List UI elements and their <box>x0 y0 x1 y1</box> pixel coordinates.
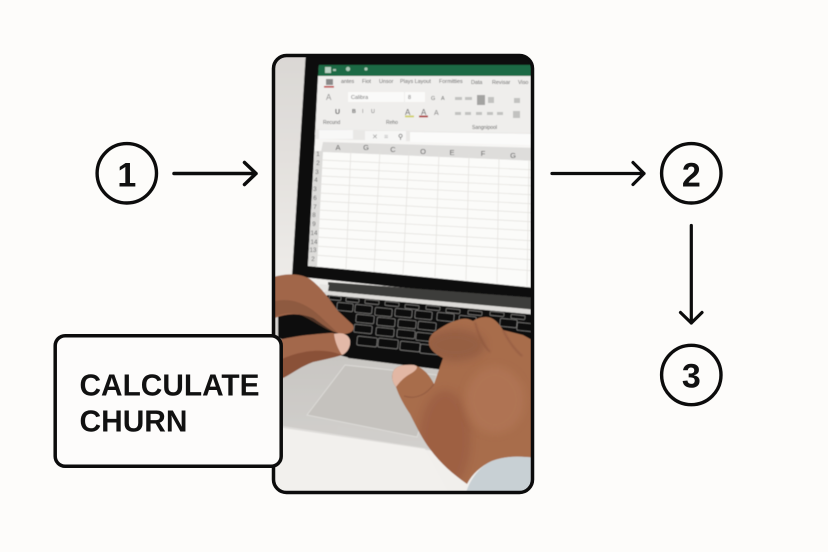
left hand <box>270 274 354 384</box>
arrow: photo to step 2 <box>552 162 644 184</box>
formula bar <box>315 135 410 141</box>
laptop screen: ✕ <box>372 134 378 141</box>
title bar <box>318 65 536 76</box>
step 2 badge: 2 <box>682 156 701 194</box>
laptop screen: antes <box>341 79 354 85</box>
laptop screen: G <box>431 96 435 102</box>
trackpad <box>307 365 437 437</box>
laptop screen: Unsor <box>379 79 394 85</box>
laptop screen: 3 <box>315 169 319 176</box>
laptop screen: Viso <box>518 80 528 86</box>
table surface <box>283 428 425 450</box>
step 2 badge <box>662 144 721 203</box>
callout: calculate churn: CALCULATE <box>80 369 260 403</box>
laptop screen: 3 <box>313 186 317 193</box>
column headers <box>321 142 536 161</box>
step 1 badge <box>97 144 156 203</box>
laptop screen: 7 <box>313 204 317 211</box>
step 3 badge: 3 <box>682 358 701 396</box>
laptop screen: F <box>481 149 486 158</box>
laptop screen: 2 <box>311 256 315 263</box>
laptop screen: U <box>371 109 375 115</box>
wall behind laptop <box>275 57 306 230</box>
arrow: step 1 to photo <box>174 162 256 184</box>
ribbon <box>314 75 319 136</box>
laptop screen: Plays Layout <box>400 79 431 85</box>
laptop deck <box>275 317 440 450</box>
laptop screen: Fiot <box>362 79 371 85</box>
laptop screen: 2 <box>316 160 320 167</box>
laptop screen: O <box>420 147 426 156</box>
laptop screen: Revisar <box>492 80 510 86</box>
laptop screen: 4 <box>314 177 318 184</box>
callout: calculate churn <box>55 336 281 466</box>
laptop screen: 6 <box>313 195 317 202</box>
laptop screen: 14 <box>311 230 318 237</box>
laptop bezel <box>292 50 538 302</box>
laptop screen: A <box>434 110 439 117</box>
laptop screen: Calibra <box>351 95 368 101</box>
laptop screen: A <box>326 93 332 102</box>
laptop screen <box>308 65 536 288</box>
spreadsheet grid <box>328 268 531 288</box>
laptop screen: Recund <box>323 120 340 126</box>
step 1 badge: 1 <box>117 156 136 194</box>
laptop screen: 13 <box>310 247 317 254</box>
laptop screen: C <box>390 145 396 154</box>
photo panel: laptop with spreadsheet <box>270 50 538 496</box>
laptop screen: Data <box>471 80 482 86</box>
laptop screen: 9 <box>312 221 316 228</box>
laptop screen: A <box>421 108 427 117</box>
laptop screen: G <box>363 143 369 152</box>
laptop screen: A <box>441 96 445 102</box>
callout: calculate churn: CHURN <box>80 405 188 439</box>
laptop screen: 14 <box>311 239 318 246</box>
laptop screen: 8 <box>408 95 411 101</box>
laptop screen: B <box>352 109 356 115</box>
right hand <box>392 317 534 490</box>
laptop screen: Formitties <box>439 79 463 85</box>
photo frame <box>274 56 532 492</box>
laptop screen: ≡ <box>384 134 388 141</box>
shirt cuff <box>466 456 531 491</box>
arrow: step 2 to step 3 <box>680 226 702 323</box>
infographic canvas <box>53 54 723 494</box>
laptop screen: Sangnipool <box>472 125 497 131</box>
step 3 badge <box>662 345 721 405</box>
laptop screen: 8 <box>312 212 316 219</box>
laptop hinge <box>328 282 538 311</box>
keyboard <box>276 291 531 336</box>
laptop screen: I <box>362 109 364 115</box>
laptop screen: E <box>449 148 455 157</box>
laptop screen: 1 <box>316 151 320 158</box>
laptop screen: G <box>510 151 516 160</box>
laptop screen: U <box>335 109 340 116</box>
laptop screen: Reho <box>386 120 398 126</box>
laptop screen: A <box>335 143 341 152</box>
laptop screen: A <box>405 108 411 117</box>
laptop screen: ⚲ <box>398 133 403 141</box>
